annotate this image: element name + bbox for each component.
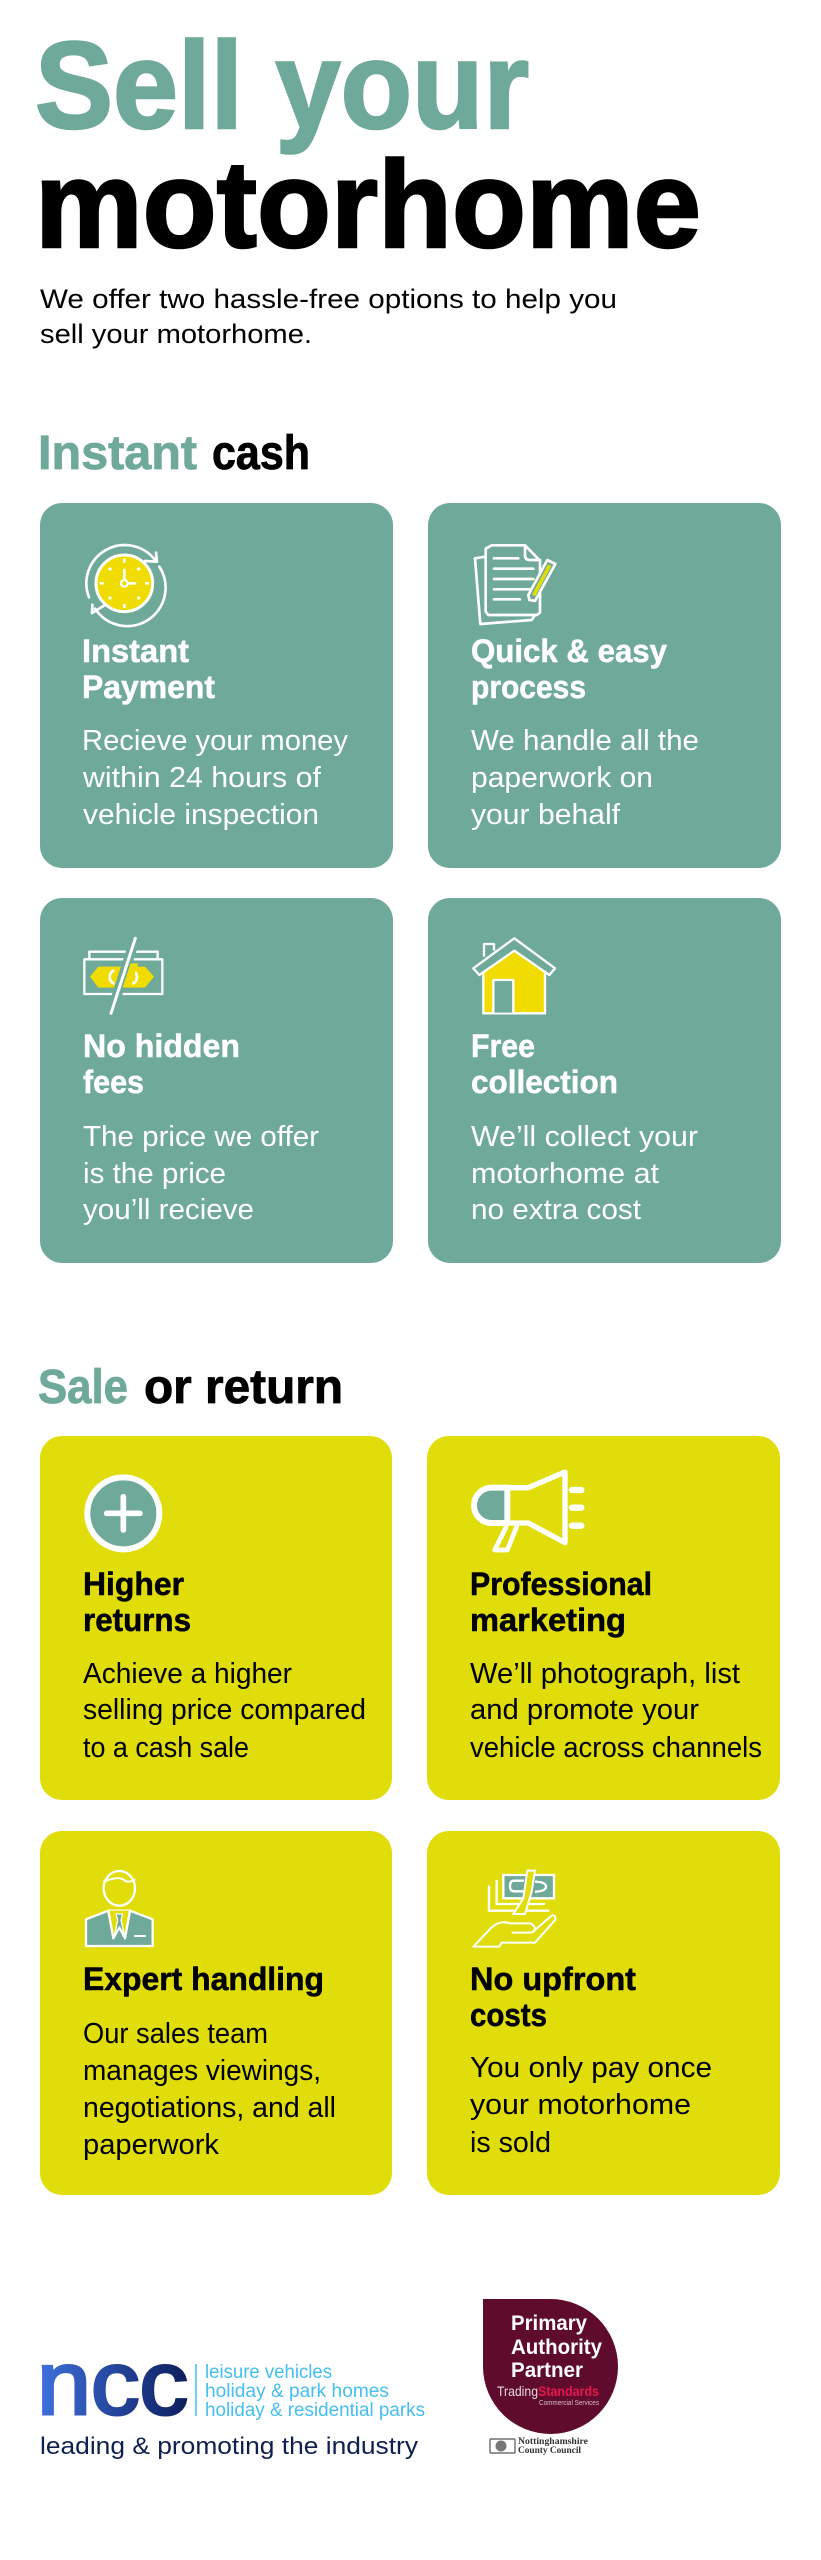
panel: higher returns	[40, 1436, 392, 1800]
logo: ncc: leading & promoting the industry	[40, 2433, 418, 2460]
body text: motorhome at	[471, 1158, 659, 1190]
heading: Free	[471, 1028, 535, 1064]
icon: plus in circle	[87, 1477, 159, 1549]
heading: collection	[471, 1064, 618, 1100]
intro text: sell your motorhome.	[40, 319, 312, 349]
body text	[470, 1658, 762, 1764]
badge: primary authority partner: Authority	[511, 2336, 602, 2359]
panel: free collection	[428, 898, 781, 1263]
body text: selling price compared	[83, 1694, 366, 1726]
heading: Expert handling	[83, 1961, 324, 1997]
logo: Nottinghamshire County Council	[490, 2437, 588, 2456]
title: motorhome	[35, 137, 701, 274]
badge: primary authority partner: Commercial Services	[539, 2400, 599, 2407]
body text: Our sales team	[83, 2018, 268, 2050]
heading: Payment	[82, 669, 215, 705]
badge: primary authority partner: Trading	[497, 2383, 538, 2399]
body text: and promote your	[470, 1694, 700, 1726]
logo: Nottinghamshire County Council: Nottinghamshire	[518, 2437, 588, 2447]
body text	[471, 1121, 699, 1226]
icon: house	[473, 938, 555, 1013]
body text: you’ll recieve	[83, 1194, 254, 1226]
heading: Instant	[82, 633, 189, 669]
body text: vehicle across channels	[470, 1732, 762, 1764]
icon: person in suit	[86, 1871, 153, 1946]
body text	[83, 2018, 336, 2161]
body text: paperwork	[83, 2129, 220, 2161]
body text: Recieve your money	[82, 725, 349, 757]
heading: fees	[83, 1064, 144, 1100]
heading	[471, 633, 667, 705]
body text: is sold	[470, 2127, 551, 2159]
icon: clock with arrows	[86, 545, 166, 626]
body text: We handle all the	[471, 725, 699, 757]
icon: hand with cash	[473, 1871, 556, 1947]
title	[35, 18, 701, 274]
badge: primary authority partner: Partner	[511, 2359, 583, 2382]
intro text: We offer two hassle-free options to help you	[40, 284, 617, 314]
logo: Nottinghamshire County Council: County Council	[518, 2446, 581, 2456]
panel: expert handling	[40, 1831, 392, 2195]
heading: No hidden	[83, 1028, 240, 1064]
body text: negotiations, and all	[83, 2092, 336, 2124]
body text: your behalf	[471, 799, 620, 831]
heading: marketing	[470, 1602, 626, 1638]
logo: ncc	[37, 2334, 425, 2460]
body text: vehicle inspection	[83, 799, 319, 831]
heading	[470, 1961, 636, 2033]
heading	[470, 1566, 652, 1638]
heading	[83, 1566, 191, 1638]
body text: paperwork on	[471, 762, 653, 794]
intro text	[40, 284, 617, 349]
body text: We’ll collect your	[471, 1121, 699, 1153]
body text: within 24 hours of	[82, 762, 321, 794]
heading: Instant cash	[38, 427, 310, 480]
heading: Higher	[83, 1566, 184, 1602]
icon: crossed out banknote	[84, 938, 162, 1013]
body text	[471, 725, 699, 831]
heading: No upfront	[470, 1961, 636, 1997]
panel: instant payment	[40, 503, 393, 868]
panel: no hidden fees	[40, 898, 393, 1263]
body text	[83, 1658, 366, 1764]
logo: ncc: ncc	[37, 2334, 188, 2434]
panel: quick and easy process	[428, 503, 781, 868]
heading	[83, 1028, 240, 1100]
heading: Sale or return: Sale	[38, 1361, 128, 1414]
heading: Quick & easy	[471, 633, 667, 669]
panel: professional marketing	[427, 1436, 780, 1800]
heading	[471, 1028, 618, 1100]
heading: process	[471, 669, 586, 705]
body text: Achieve a higher	[83, 1658, 292, 1690]
heading: Professional	[470, 1566, 652, 1602]
badge: primary authority partner: Standards	[538, 2383, 599, 2399]
heading: Sale or return	[38, 1361, 343, 1414]
title: Sell your	[35, 18, 529, 155]
body text: your motorhome	[470, 2089, 691, 2121]
body text: is the price	[83, 1158, 226, 1190]
heading: returns	[83, 1602, 191, 1638]
logo: ncc: leisure vehicles	[205, 2362, 332, 2383]
heading: Sale or return: or return	[144, 1361, 343, 1414]
logo: ncc: holiday & park homes	[205, 2381, 389, 2402]
logo: ncc: holiday & residential parks	[205, 2400, 425, 2421]
body text	[83, 1121, 320, 1226]
badge: primary authority partner	[483, 2299, 618, 2434]
icon: documents and pencil	[475, 545, 555, 624]
heading: Instant cash: cash	[212, 427, 310, 480]
heading	[82, 633, 215, 705]
panel: no upfront costs	[427, 1831, 780, 2195]
heading: Instant cash: Instant	[38, 427, 197, 480]
body text	[82, 725, 349, 831]
body text	[470, 2052, 712, 2159]
body text: no extra cost	[471, 1194, 641, 1226]
body text: We’ll photograph, list	[470, 1658, 740, 1690]
body text: The price we offer	[83, 1121, 320, 1153]
heading: costs	[470, 1997, 547, 2033]
icon: megaphone	[474, 1472, 581, 1550]
badge: primary authority partner: Primary	[511, 2312, 587, 2335]
body text: You only pay once	[470, 2052, 712, 2084]
body text: to a cash sale	[83, 1732, 249, 1764]
body text: manages viewings,	[83, 2055, 321, 2087]
